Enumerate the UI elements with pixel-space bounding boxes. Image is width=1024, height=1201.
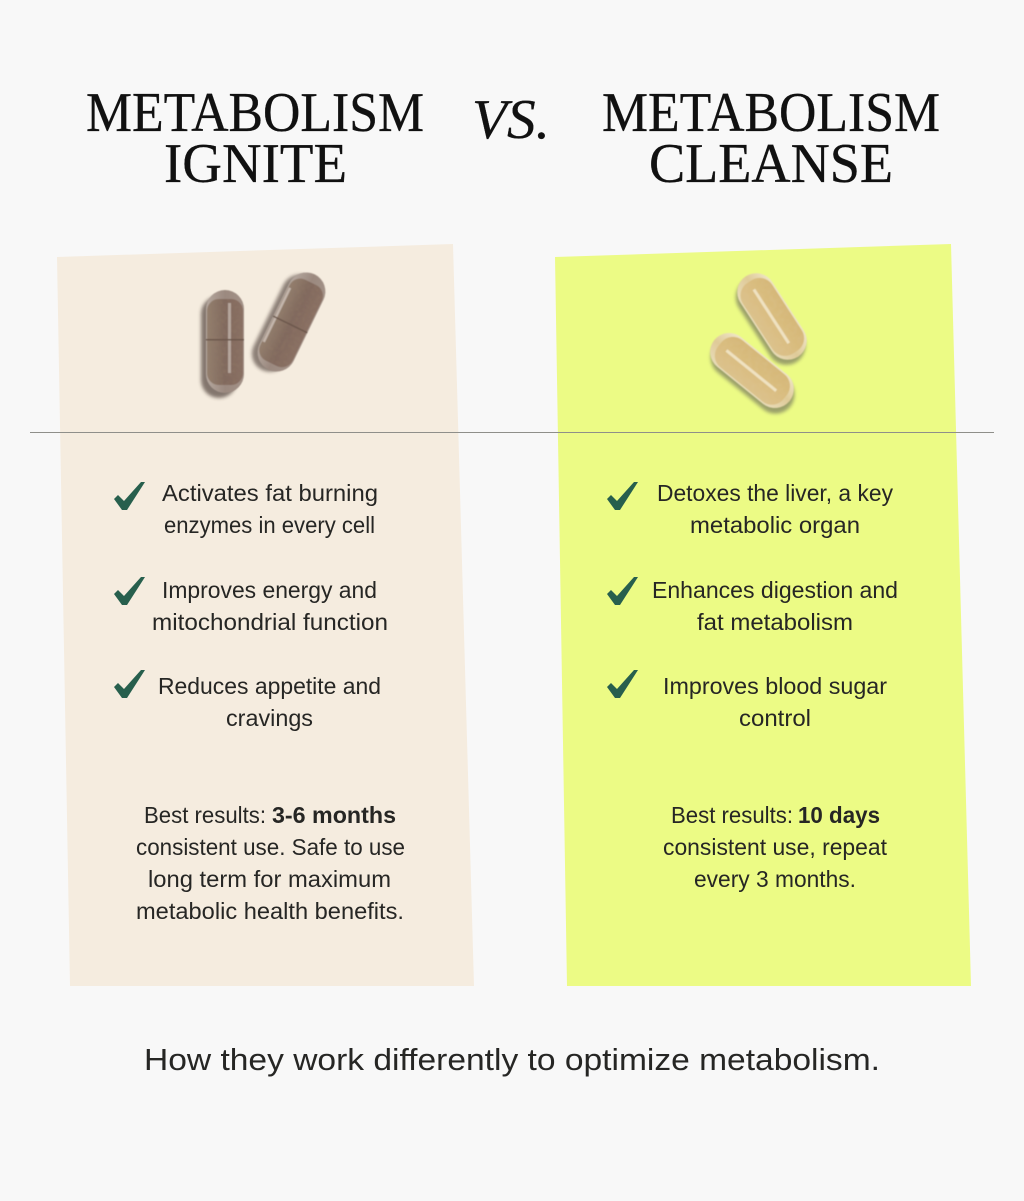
icon: checkmark bbox=[114, 577, 145, 605]
benefit: energy: Improves energy and bbox=[162, 577, 377, 603]
footer caption: How they work differently to optimize metabolism. bbox=[144, 1042, 880, 1077]
icon: brown capsules bbox=[201, 264, 332, 398]
divider line bbox=[30, 432, 994, 433]
icon: checkmark bbox=[607, 577, 638, 605]
benefit: appetite: cravings bbox=[226, 705, 313, 731]
benefit: digestion: fat metabolism bbox=[697, 609, 853, 635]
benefit: fat burning: Activates fat burning bbox=[162, 480, 378, 506]
benefit: energy: mitochondrial function bbox=[152, 609, 388, 635]
benefit: liver: Detoxes the liver, a key bbox=[657, 480, 893, 506]
best results: ignite: metabolic health benefits. bbox=[136, 898, 404, 924]
benefit: appetite: Reduces appetite and bbox=[158, 673, 381, 699]
icon: yellow capsules bbox=[700, 266, 816, 421]
best results: cleanse: consistent use, repeat bbox=[663, 834, 888, 860]
best results: cleanse: 10 days bbox=[798, 802, 880, 828]
icon: checkmark bbox=[607, 482, 638, 510]
benefit: blood sugar: Improves blood sugar bbox=[663, 673, 887, 699]
title: metabolism cleanse: CLEANSE bbox=[649, 133, 893, 195]
icon: checkmark bbox=[114, 482, 145, 510]
best results: ignite: Best results: bbox=[144, 802, 266, 828]
benefit: liver: metabolic organ bbox=[690, 512, 860, 538]
benefit: digestion: Enhances digestion and bbox=[652, 577, 898, 603]
title: vs: VS. bbox=[472, 89, 550, 151]
benefit: blood sugar: control bbox=[739, 705, 811, 731]
icon: checkmark bbox=[607, 670, 638, 698]
title: metabolism ignite: METABOLISM bbox=[86, 82, 424, 144]
best results: cleanse: Best results: bbox=[671, 802, 793, 828]
best results: ignite: long term for maximum bbox=[148, 866, 391, 892]
panel: metabolism ignite bbox=[57, 244, 474, 986]
title: metabolism ignite: IGNITE bbox=[164, 133, 347, 195]
icon: checkmark bbox=[114, 670, 145, 698]
title: metabolism cleanse: METABOLISM bbox=[602, 82, 940, 144]
best results: cleanse: every 3 months. bbox=[694, 866, 856, 892]
best results: ignite: consistent use. Safe to use bbox=[136, 834, 405, 860]
benefit: fat burning: enzymes in every cell bbox=[164, 512, 375, 538]
best results: ignite: 3-6 months bbox=[272, 802, 396, 828]
panel: metabolism cleanse bbox=[555, 244, 971, 986]
